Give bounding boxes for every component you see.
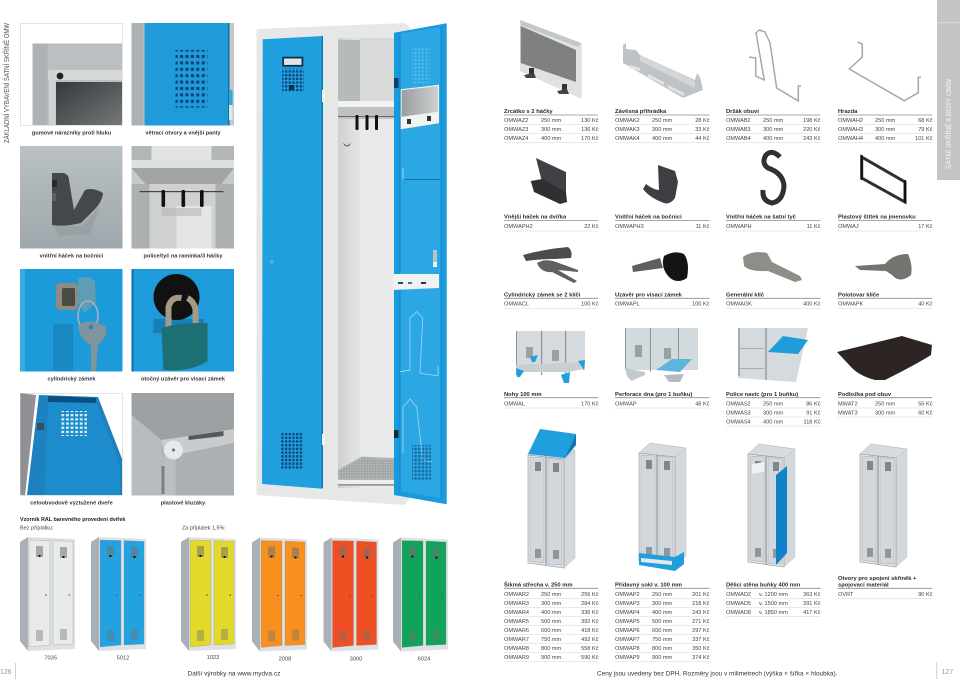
accessory: extra shelf <box>738 328 808 382</box>
table: extra shelf: OMWAS4 <box>726 419 751 425</box>
main locker illustration <box>256 23 447 505</box>
table: sloped roof: 500 mm <box>541 619 562 625</box>
table: shoe holder <box>726 109 821 143</box>
table: sloped roof <box>504 580 599 662</box>
photo: reinforced door <box>20 393 122 506</box>
table: shoe tray: 300 mm <box>875 410 896 416</box>
table: key blank <box>838 293 933 308</box>
table: sloped roof: OMWAR7 <box>504 637 529 643</box>
table: extra plinth: 300 mm <box>652 601 673 607</box>
table: hanging compartment: OMWAK2 <box>615 118 640 124</box>
table: cylinder lock: OMWACL <box>504 302 529 308</box>
table: mirror: 250 mm <box>541 118 562 124</box>
table: mirror: OMWAZ3 <box>504 127 528 133</box>
caption: plastic slider: plastové kluzáky <box>161 500 206 506</box>
table: mirror: 170 Kč <box>581 136 599 142</box>
table: rod hook: Vnitřní háček na šatní tyč <box>726 215 797 221</box>
accessory: S hook <box>763 152 784 203</box>
table: extra plinth: OMWAP2 <box>615 592 640 598</box>
table: extra shelf <box>726 392 821 426</box>
table: extra plinth: 374 Kč <box>692 655 710 661</box>
accessory: extra plinth locker <box>639 443 686 571</box>
table: extra shelf: 118 Kč <box>804 419 821 425</box>
table: shoe tray: 60 Kč <box>918 410 933 416</box>
table: key blank: 40 Kč <box>918 302 933 308</box>
table: sloped roof: 256 Kč <box>581 592 599 598</box>
table: hanging compartment: OMWAK3 <box>615 127 640 133</box>
table: inner side hook: OMWAPH3 <box>615 224 644 230</box>
table: padlock latch: OMWAPL <box>615 302 640 308</box>
colour locker 6024: 6024 <box>418 656 430 662</box>
colour locker 3000 <box>324 538 378 662</box>
accessory: sloped roof locker <box>528 429 576 568</box>
table: extra plinth: 250 mm <box>652 592 673 598</box>
table: perforated floor: 48 Kč <box>695 401 710 407</box>
table: extra shelf: 300 mm <box>763 410 784 416</box>
accessory: cylinder lock with keys <box>523 247 578 283</box>
table: rail: Hrazda <box>838 109 858 115</box>
table: sloped roof: 400 mm <box>541 610 562 616</box>
RAL colour heading: Vzorník RAL barevného provedení dvířek <box>20 517 125 523</box>
table: sloped roof: OMWAR6 <box>504 628 529 634</box>
left door <box>262 36 325 489</box>
accessory: key blank <box>855 254 912 280</box>
table: key blank: OMWAPK <box>838 302 864 308</box>
accessory: name tag frame <box>861 155 906 203</box>
table: shoe holder: 300 mm <box>763 127 784 133</box>
table: sloped roof: OMWAR4 <box>504 610 529 616</box>
table: extra shelf: 86 Kč <box>806 401 821 407</box>
table: sloped roof: OMWAR9 <box>504 655 529 661</box>
table: extra plinth: 218 Kč <box>692 601 710 607</box>
caption: inner side hook: vnitřní háček na bočnici <box>40 254 104 260</box>
table: connection holes: spojovací materiál <box>838 583 889 589</box>
table: sloped roof: OMWAR5 <box>504 619 529 625</box>
colour locker 5012 <box>91 537 146 662</box>
table: master key <box>726 293 821 308</box>
table: inner side hook: 11 Kč <box>696 224 710 230</box>
table: name tag: 17 Kč <box>918 224 933 230</box>
table: extra plinth: OMWAP3 <box>615 601 640 607</box>
table: divider wall: v. 1200 mm <box>759 592 788 598</box>
caption: rubber bumpers: gumové nárazníky proti hluku <box>32 130 112 136</box>
table: rail <box>838 109 933 143</box>
table: sloped roof: 600 mm <box>541 628 562 634</box>
table: mirror: 136 Kč <box>581 127 599 133</box>
table: perforated floor <box>615 392 710 408</box>
table: hanging compartment: 28 Kč <box>695 118 710 124</box>
table: rail: 101 Kč <box>915 136 933 142</box>
table: sloped roof: 418 Kč <box>581 628 599 634</box>
accessory: divider wall locker <box>748 444 795 567</box>
photo: cylinder lock <box>20 269 122 382</box>
table: padlock latch <box>615 293 710 308</box>
table: extra plinth: 500 mm <box>652 619 673 625</box>
table: mirror <box>504 109 599 143</box>
table: rail: 79 Kč <box>918 127 933 133</box>
table: hanging compartment <box>615 109 710 143</box>
table: mirror: OMWAZ4 <box>504 136 528 142</box>
table: extra plinth: 800 mm <box>652 646 673 652</box>
accessory: master key <box>743 252 802 282</box>
table: divider wall <box>726 582 821 616</box>
table: shoe holder: Držák obuvi <box>726 109 759 115</box>
table: mirror: Zrcátko s 2 háčky <box>504 109 553 115</box>
label: surcharge: Za příplatek 1,5%: <box>182 526 226 532</box>
table: outer hook: OMWAPH2 <box>504 224 533 230</box>
table: rod hook: 11 Kč <box>807 224 821 230</box>
table: divider wall: OMWAD5 <box>726 601 751 607</box>
table: extra plinth: OMWAP4 <box>615 610 640 616</box>
table: sloped roof: 590 Kč <box>581 655 599 661</box>
table: extra plinth: OMWAP7 <box>615 637 640 643</box>
table: rail: OMWAH4 <box>838 136 863 142</box>
table: rail: 250 mm <box>875 118 896 124</box>
table: shoe tray: 55 Kč <box>918 401 933 407</box>
table: connection holes <box>838 576 933 598</box>
table: sloped roof: 900 mm <box>541 655 562 661</box>
table: outer hook <box>504 215 599 231</box>
table: extra plinth: OMWAP9 <box>615 655 640 661</box>
caption: shelf: police/tyč na ramínka/3 háčky <box>144 254 223 260</box>
accessory: shoe holder <box>749 30 801 101</box>
table: sloped roof: OMWAR2 <box>504 592 529 598</box>
table: hanging compartment: 44 Kč <box>695 136 710 142</box>
footer note: more products: Další výrobky na www.mydva.cz <box>188 670 280 678</box>
table: extra plinth: 600 mm <box>652 628 673 634</box>
photo: plastic slider <box>132 393 234 506</box>
table: sloped roof: 250 mm <box>541 592 562 598</box>
photo: vents and hinges <box>132 23 234 136</box>
colour locker 1023 <box>181 537 236 661</box>
table: cylinder lock <box>504 293 599 308</box>
table: divider wall: Dělicí stěna buňky 400 mm <box>726 582 800 588</box>
table: master key: OMWAGK <box>726 302 752 308</box>
table: cylinder lock: 100 Kč <box>581 302 599 308</box>
photo: rotary padlock closure <box>132 269 234 382</box>
table: extra plinth: OMWAP6 <box>615 628 640 634</box>
table: rail: OMWAH3 <box>838 127 863 133</box>
table: divider wall: OMWAD8 <box>726 610 751 616</box>
table: sloped roof: 284 Kč <box>581 601 599 607</box>
table: extra plinth: 750 mm <box>652 637 673 643</box>
table: hanging compartment: Závěsná přihrádka <box>615 109 667 115</box>
table: shoe holder: 400 mm <box>763 136 784 142</box>
table: extra plinth: 271 Kč <box>692 619 710 625</box>
page number 126: 126 <box>0 669 12 676</box>
photo: shelf with rail and hooks <box>132 146 234 260</box>
photo: rubber bumpers <box>20 23 122 136</box>
table: extra shelf: 250 mm <box>763 401 784 407</box>
colour locker 7035 <box>20 537 75 662</box>
table: inner side hook <box>615 215 710 231</box>
accessory: legs <box>516 331 585 383</box>
table: extra plinth <box>615 582 710 662</box>
colour locker 1023: 1023 <box>207 655 219 661</box>
table: extra plinth: 400 mm <box>652 610 673 616</box>
accessory: hanging compartment <box>623 43 703 98</box>
table: rail: 300 mm <box>875 127 896 133</box>
table: divider wall: 363 Kč <box>803 592 821 598</box>
locker interior <box>338 38 394 488</box>
table: outer hook: Vnější háček na dvířka <box>504 215 567 221</box>
table: extra shelf: OMWAS2 <box>726 401 751 407</box>
table: shoe tray: 250 mm <box>875 401 896 407</box>
table: divider wall: v. 1500 mm <box>759 601 788 607</box>
table: master key: 400 Kč <box>803 302 821 308</box>
footer note: prices: Ceny jsou uvedeny bez DPH. Rozměry jsou v milimetrech (výška × šířka × hloubka). <box>597 670 838 678</box>
caption: cylinder lock: cylindrický zámek <box>48 376 96 382</box>
table: key blank: Polotovar klíče <box>838 293 880 299</box>
table: shoe holder: OMWAB2 <box>726 118 751 124</box>
table: divider wall: 391 Kč <box>803 601 821 607</box>
table: padlock latch: Uzávěr pro visací zámek <box>615 293 683 299</box>
colour locker 2008 <box>252 538 307 662</box>
table: sloped roof: 750 mm <box>541 637 562 643</box>
table: mirror: 130 Kč <box>581 118 599 124</box>
table: sloped roof: 800 mm <box>541 646 562 652</box>
accessory: rail bracket <box>849 42 921 101</box>
colour locker 5012: 5012 <box>117 656 129 662</box>
table: hanging compartment: OMWAK4 <box>615 136 640 142</box>
table: rod hook <box>726 215 821 231</box>
accessory: outer door hook <box>531 158 567 204</box>
table: legs <box>504 392 599 408</box>
caption: vents: větrací otvory a vnější panty <box>145 130 222 136</box>
table: extra shelf: Police navíc (pro 1 buňku) <box>726 392 798 398</box>
table: rail: OMWAH2 <box>838 118 863 124</box>
table: shoe holder: OMWAB4 <box>726 136 751 142</box>
table: mirror: 300 mm <box>541 127 562 133</box>
accessory: shoe tray <box>837 336 932 380</box>
colour locker 6024 <box>393 538 448 662</box>
table: perforated floor: OMWAP <box>615 401 637 407</box>
table: shoe holder: 250 mm <box>763 118 784 124</box>
table: sloped roof: OMWAR3 <box>504 601 529 607</box>
table: extra plinth: 297 Kč <box>692 628 710 634</box>
table: shoe holder: 243 Kč <box>803 136 821 142</box>
page number 126 <box>0 663 16 679</box>
table: name tag <box>838 215 933 231</box>
table: shoe tray: Podložka pod obuv <box>838 392 892 398</box>
table: legs: 170 Kč <box>581 401 599 407</box>
table: rail: 400 mm <box>875 136 896 142</box>
colour locker 2008: 2008 <box>279 656 291 662</box>
table: name tag: OMWAJ <box>838 224 859 230</box>
colour locker 7035: 7035 <box>44 656 57 662</box>
right open door <box>393 23 447 504</box>
table: legs: OMWAL <box>504 401 525 407</box>
table: perforated floor: Perforace dna (pro 1 buňku) <box>615 392 692 398</box>
table: hanging compartment: 33 Kč <box>695 127 710 133</box>
accessory: inner side hook <box>643 165 678 203</box>
table: shoe holder: OMWAB3 <box>726 127 751 133</box>
table: shoe tray: MWAT3 <box>838 410 858 416</box>
table: extra plinth: OMWAP5 <box>615 619 640 625</box>
left side heading: ZÁKLADNÍ VYBAVENÍ ŠATNÍ SKŘÍNĚ OMW <box>2 23 11 143</box>
table: shoe tray: MWAT2 <box>838 401 858 407</box>
table: sloped roof: Šikmá střecha v. 250 mm <box>504 580 573 588</box>
table: extra plinth: 201 Kč <box>692 592 710 598</box>
table: mirror: OMWAZ2 <box>504 118 528 124</box>
table: extra plinth: Přídavný sokl v. 100 mm <box>615 582 682 588</box>
table: sloped roof: 558 Kč <box>581 646 599 652</box>
table: extra shelf: 400 mm <box>763 419 784 425</box>
table: sloped roof: 300 mm <box>541 601 562 607</box>
table: mirror: 400 mm <box>541 136 562 142</box>
page number 127 <box>936 662 953 679</box>
accessory: mirror with 2 hooks <box>520 20 582 99</box>
table: legs: Nohy 100 mm <box>504 392 542 398</box>
table: divider wall: OMWAD2 <box>726 592 751 598</box>
table: extra plinth: OMWAP8 <box>615 646 640 652</box>
side tab <box>937 0 960 180</box>
label: no surcharge: Bez příplatku: <box>20 526 54 532</box>
table: sloped roof: 336 Kč <box>581 610 599 616</box>
side tab label: ŠATNÍ SKŘÍNĚ A BOXY OMW <box>944 79 953 169</box>
table: outer hook: 22 Kč <box>584 224 599 230</box>
table: divider wall: 417 Kč <box>803 610 821 616</box>
accessory: padlock latch <box>632 252 688 281</box>
table: shoe holder: 220 Kč <box>803 127 821 133</box>
table: connection holes: 90 Kč <box>918 592 933 598</box>
table: sloped roof: OMWAR8 <box>504 646 529 652</box>
table: rail: 68 Kč <box>918 118 933 124</box>
table: extra plinth: 900 mm <box>652 655 673 661</box>
table: connection holes: Otvory pro spojení skříněk + <box>838 576 917 582</box>
table: extra shelf: OMWAS3 <box>726 410 751 416</box>
table: rod hook: OMWAPH <box>726 224 752 230</box>
table: padlock latch: 100 Kč <box>692 302 710 308</box>
table: sloped roof: 492 Kč <box>581 637 599 643</box>
photo: inner side hook <box>20 146 122 260</box>
page number 127: 127 <box>942 669 953 676</box>
table: name tag: Plastový štítek na jmenovku <box>838 215 916 221</box>
table: extra shelf: 91 Kč <box>806 410 821 416</box>
table: master key: Generální klíč <box>726 293 765 299</box>
table: hanging compartment: 300 mm <box>652 127 673 133</box>
table: shoe holder: 198 Kč <box>803 118 821 124</box>
table: hanging compartment: 250 mm <box>652 118 673 124</box>
locker body <box>256 23 410 505</box>
colour locker 3000: 3000 <box>350 656 362 662</box>
table: inner side hook: Vnitřní háček na bočnici <box>615 215 682 221</box>
table: hanging compartment: 400 mm <box>652 136 673 142</box>
accessory: perforated floor <box>625 328 698 382</box>
table: shoe tray <box>838 392 933 417</box>
caption: reinforced door: celoobvodově vyztužené dveře <box>30 500 113 506</box>
table: extra plinth: 337 Kč <box>692 637 710 643</box>
table: cylinder lock: Cylindrický zámek se 2 klíči <box>504 293 581 299</box>
caption: padlock closure: otočný uzávěr pro visací zámek <box>141 376 226 382</box>
table: divider wall: v. 1850 mm <box>759 610 788 616</box>
table: sloped roof: 392 Kč <box>581 619 599 625</box>
accessory: connection holes locker <box>860 444 907 567</box>
table: extra plinth: 350 Kč <box>692 646 710 652</box>
table: connection holes: OVRT <box>838 592 854 598</box>
table: extra plinth: 243 Kč <box>692 610 710 616</box>
